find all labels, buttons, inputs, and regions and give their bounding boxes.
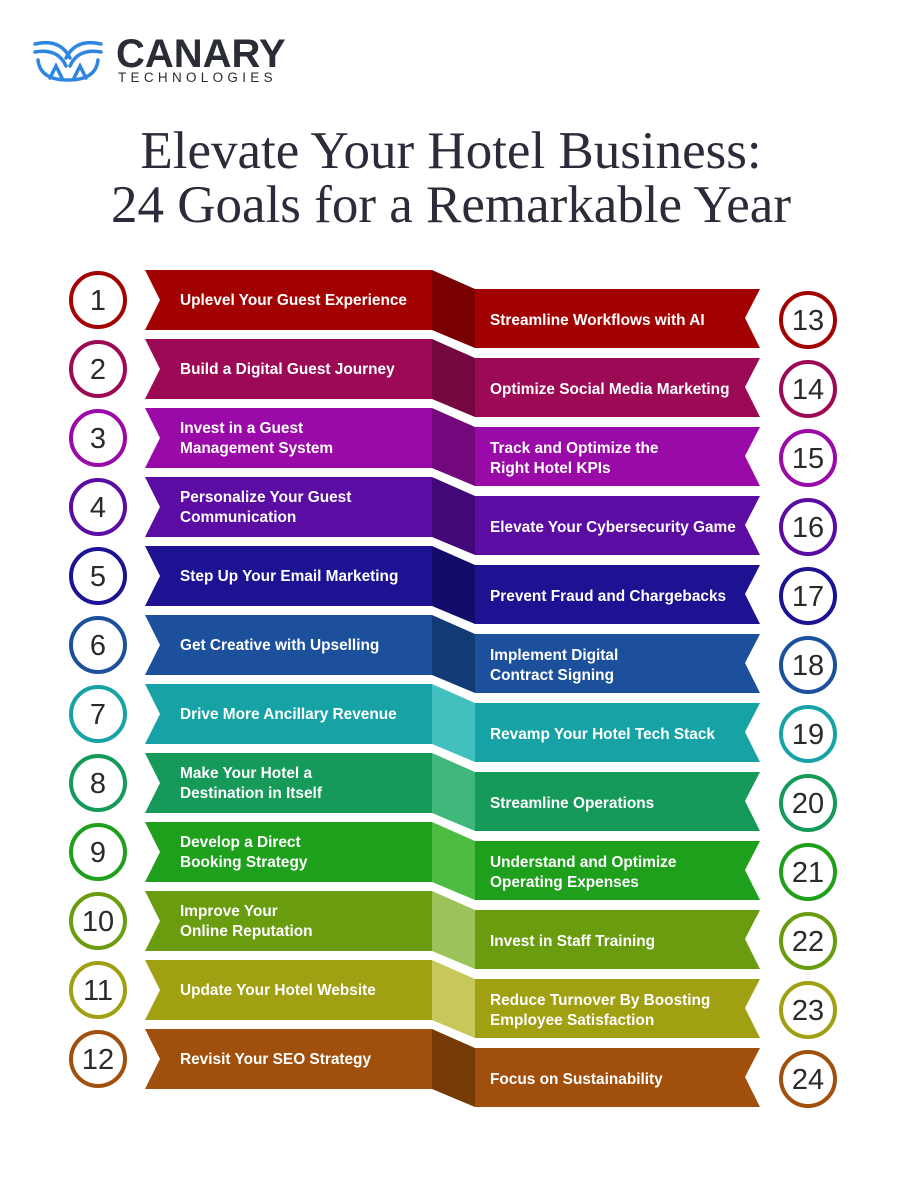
row 10: 10 xyxy=(82,906,114,938)
row 11: Employee Satisfaction xyxy=(490,1012,654,1029)
row 4: 4 xyxy=(90,492,106,524)
row 9: 21 xyxy=(792,857,824,889)
row 4: 16 xyxy=(792,512,824,544)
row 9: 9 xyxy=(90,837,106,869)
row 10 xyxy=(71,891,835,969)
row 10: Invest in Staff Training xyxy=(490,933,655,950)
row 2: Build a Digital Guest Journey xyxy=(180,361,395,378)
row 11: Update Your Hotel Website xyxy=(180,982,376,999)
row 5: 5 xyxy=(90,561,106,593)
row 7: 19 xyxy=(792,719,824,751)
row 8: Make Your Hotel a xyxy=(180,765,312,782)
row 6: 6 xyxy=(90,630,106,662)
row 5: Step Up Your Email Marketing xyxy=(180,568,398,585)
row 8: 8 xyxy=(90,768,106,800)
row 6: 18 xyxy=(792,650,824,682)
row 6 xyxy=(71,615,835,693)
row 11 xyxy=(71,960,835,1038)
row 7: Revamp Your Hotel Tech Stack xyxy=(490,726,715,743)
row 9: Understand and Optimize xyxy=(490,854,677,871)
row 4: Elevate Your Cybersecurity Game xyxy=(490,519,736,536)
row 9: Booking Strategy xyxy=(180,854,308,871)
row 1: Streamline Workflows with AI xyxy=(490,312,705,329)
row 2: Optimize Social Media Marketing xyxy=(490,381,729,398)
logo xyxy=(35,32,286,85)
row 6: Get Creative with Upselling xyxy=(180,637,379,654)
row 2: 14 xyxy=(792,374,824,406)
row 2 xyxy=(71,339,835,417)
goals list xyxy=(71,270,835,1107)
row 10: Online Reputation xyxy=(180,923,313,940)
row 3: 3 xyxy=(90,423,106,455)
row 7 xyxy=(71,684,835,762)
row 3: Management System xyxy=(180,440,333,457)
row 3: Track and Optimize the xyxy=(490,440,659,457)
row 4: Communication xyxy=(180,509,296,526)
row 7: Drive More Ancillary Revenue xyxy=(180,706,397,723)
row 12 xyxy=(71,1029,835,1107)
row 4 xyxy=(71,477,835,555)
row 3: Invest in a Guest xyxy=(180,420,303,437)
row 8: Destination in Itself xyxy=(180,785,323,802)
row 10: 22 xyxy=(792,926,824,958)
row 1: 1 xyxy=(90,285,106,317)
row 2: 2 xyxy=(90,354,106,386)
row 12: Focus on Sustainability xyxy=(490,1071,663,1088)
row 12: 24 xyxy=(792,1064,824,1096)
row 7: 7 xyxy=(90,699,106,731)
row 6: Implement Digital xyxy=(490,647,618,664)
row 11: 11 xyxy=(83,975,113,1007)
row 12: Revisit Your SEO Strategy xyxy=(180,1051,371,1068)
row 6: Contract Signing xyxy=(490,667,614,684)
row 12: 12 xyxy=(82,1044,114,1076)
logo: CANARY xyxy=(116,32,286,76)
icon: canary logo xyxy=(35,43,101,80)
title xyxy=(111,122,791,234)
row 11: 23 xyxy=(792,995,824,1027)
title: 24 Goals for a Remarkable Year xyxy=(111,176,791,234)
title: Elevate Your Hotel Business: xyxy=(140,122,762,180)
row 10: Improve Your xyxy=(180,903,278,920)
row 3 xyxy=(71,408,835,486)
row 5: Prevent Fraud and Chargebacks xyxy=(490,588,726,605)
row 8: Streamline Operations xyxy=(490,795,654,812)
row 1: 13 xyxy=(792,305,824,337)
row 9: Develop a Direct xyxy=(180,834,301,851)
row 9 xyxy=(71,822,835,900)
row 5: 17 xyxy=(792,581,824,613)
row 1: Uplevel Your Guest Experience xyxy=(180,292,407,309)
row 4: Personalize Your Guest xyxy=(180,489,351,506)
row 3: Right Hotel KPIs xyxy=(490,460,611,477)
row 3: 15 xyxy=(792,443,824,475)
row 8 xyxy=(71,753,835,831)
row 11: Reduce Turnover By Boosting xyxy=(490,992,710,1009)
row 5 xyxy=(71,546,835,624)
row 9: Operating Expenses xyxy=(490,874,639,891)
logo: TECHNOLOGIES xyxy=(118,70,277,85)
row 1 xyxy=(71,270,835,348)
row 8: 20 xyxy=(792,788,824,820)
